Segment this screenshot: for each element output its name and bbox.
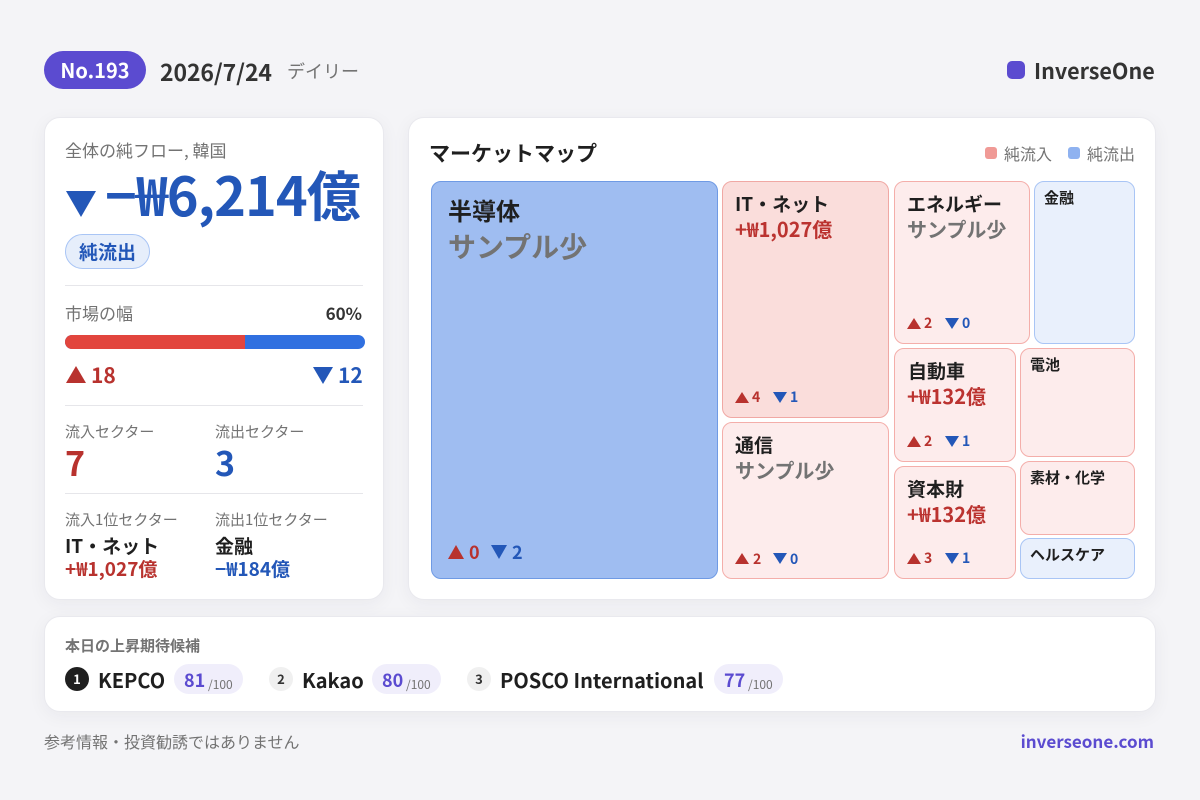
outflow sectors stat: 3 [215, 437, 235, 486]
treemap cell: IT and internet: +₩1,027億 [735, 214, 832, 243]
treemap cell: autos: 1 [962, 431, 970, 451]
inflow sectors stat: 流入セクター [65, 421, 154, 442]
treemap cell: autos [894, 348, 1016, 462]
legend: 純流出 [1087, 141, 1135, 165]
summary label: 全体の純フロー, 韓国 [65, 137, 227, 162]
treemap cell: autos: +₩132億 [907, 381, 986, 410]
candidate 2: Kakao: 2 [277, 669, 285, 688]
decliners count [313, 360, 363, 390]
treemap cell: batteries: 電池 [1030, 354, 1060, 375]
inflow sectors stat: 7 [65, 437, 85, 486]
treemap cell: semiconductors: サンプル少 [448, 226, 587, 266]
treemap cell: energy: 2 [924, 313, 932, 333]
candidate 3: POSCO International [467, 664, 783, 694]
top outflow sector: 流出1位セクター [215, 509, 328, 530]
treemap cell: capital goods: 資本財 [907, 475, 964, 502]
treemap cell: telecom [722, 422, 889, 579]
treemap cell: materials and chemicals: 素材・化学 [1030, 467, 1105, 488]
header: date: 2026/7/24 [160, 54, 272, 88]
net outflow badge [65, 234, 150, 269]
candidate 1: KEPCO [65, 664, 243, 694]
candidate 3: POSCO International: /100 [748, 676, 773, 693]
treemap cell: IT and internet: 1 [790, 387, 798, 407]
net flow value: −₩6,214億 [105, 153, 360, 232]
outflow sectors stat [215, 421, 304, 486]
advancers count: 18 [91, 360, 116, 390]
treemap cell: telecom: サンプル少 [735, 455, 834, 484]
treemap cell: telecom: 通信 [735, 431, 773, 458]
candidate 1: KEPCO: 81 [184, 667, 205, 693]
candidate 2: Kakao [269, 664, 441, 694]
panel: market map [408, 117, 1156, 600]
candidate 1: KEPCO: KEPCO [98, 665, 165, 694]
legend [985, 141, 1135, 165]
market map heading: マーケットマップ [429, 138, 597, 168]
footer: website: inverseone.com [1021, 728, 1154, 753]
candidate 2: Kakao: Kakao [302, 665, 364, 694]
treemap cell: finance [1034, 181, 1135, 344]
candidate 3: POSCO International: 77 [724, 667, 745, 693]
treemap cell: autos: 2 [924, 431, 932, 451]
header: edition label: デイリー [287, 58, 359, 84]
header: issue badge: No.193 [60, 55, 130, 84]
icon: big down triangle [66, 191, 96, 217]
decliners count: 12 [338, 360, 363, 390]
inflow sectors stat [65, 421, 154, 486]
panel: overall flow summary [44, 117, 384, 600]
top inflow sector: +₩1,027億 [65, 555, 157, 582]
candidate 2: Kakao: /100 [406, 676, 431, 693]
top outflow sector [215, 509, 328, 582]
top inflow sector [65, 509, 178, 582]
top inflow sector: 流入1位セクター [65, 509, 178, 530]
treemap cell: materials and chemicals [1020, 461, 1135, 535]
treemap cell: energy: サンプル少 [907, 214, 1006, 243]
net outflow badge: 純流出 [79, 238, 136, 265]
panel: upside candidates [44, 616, 1156, 712]
treemap cell: autos: 自動車 [908, 357, 965, 384]
treemap cell: semiconductors: 2 [512, 539, 523, 565]
candidate 1: KEPCO: /100 [208, 676, 233, 693]
candidate 3: POSCO International: 3 [475, 669, 483, 688]
treemap cell: semiconductors [431, 181, 718, 579]
treemap cell: energy: エネルギー [907, 190, 1002, 217]
treemap cell: capital goods [894, 466, 1016, 579]
treemap cell: capital goods: +₩132億 [907, 499, 986, 528]
treemap cell: finance: 金融 [1044, 187, 1074, 208]
treemap cell: energy: 0 [962, 313, 970, 333]
treemap cell: capital goods: 3 [924, 548, 932, 568]
treemap cell: capital goods: 1 [962, 548, 970, 568]
candidates heading: 本日の上昇期待候補 [65, 635, 200, 656]
advancers count [66, 360, 116, 390]
treemap cell: batteries [1020, 348, 1135, 457]
treemap cell: healthcare [1020, 538, 1135, 579]
top inflow sector: IT・ネット [65, 532, 159, 559]
candidate 1: KEPCO: 1 [73, 669, 81, 688]
footer: disclaimer: 参考情報・投資勧誘ではありません [44, 729, 300, 753]
candidate 3: POSCO International: POSCO International [500, 665, 704, 694]
breadth label: 市場の幅 [65, 300, 133, 325]
header: issue badge [44, 51, 146, 89]
breadth percent: 60% [326, 300, 362, 325]
top outflow sector: −₩184億 [215, 555, 290, 582]
treemap cell: telecom: 0 [790, 549, 798, 569]
brand name: InverseOne [1034, 55, 1155, 86]
candidate 2: Kakao: 80 [382, 667, 403, 693]
treemap cell: IT and internet: IT・ネット [735, 190, 829, 217]
treemap cell: IT and internet: 4 [752, 387, 760, 407]
treemap cell: energy [894, 181, 1030, 344]
treemap cell: semiconductors: 半導体 [448, 192, 520, 227]
outflow sectors stat: 流出セクター [215, 421, 304, 442]
treemap cell: semiconductors: 0 [469, 539, 480, 565]
icon: brand mark [1007, 61, 1025, 79]
treemap cell: IT and internet [722, 181, 889, 418]
top outflow sector: 金融 [215, 532, 253, 559]
treemap cell: healthcare: ヘルスケア [1030, 544, 1105, 565]
breadth bar [65, 335, 365, 349]
treemap cell: telecom: 2 [753, 549, 761, 569]
legend: 純流入 [1004, 141, 1052, 165]
